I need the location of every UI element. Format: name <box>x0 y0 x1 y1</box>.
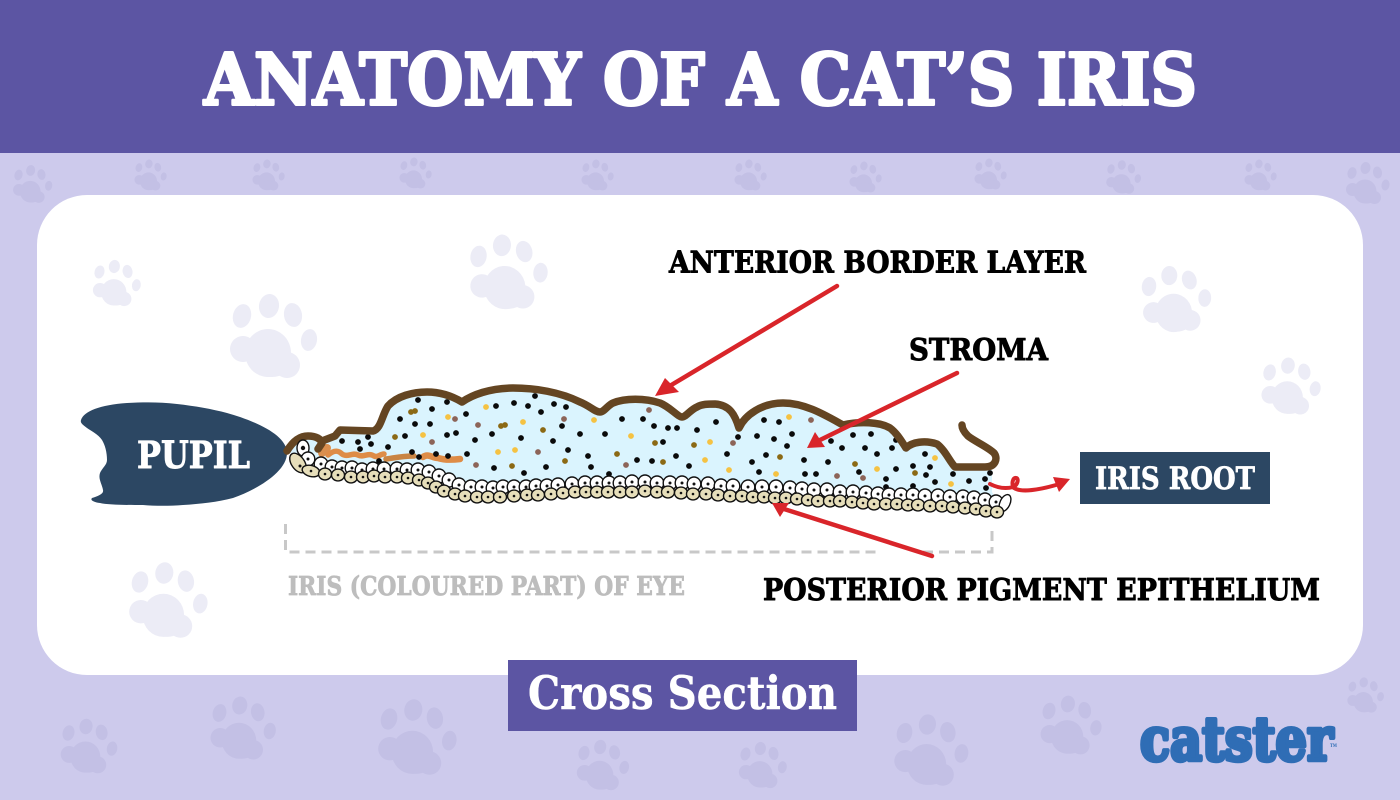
arrow: stroma <box>807 373 957 448</box>
stroma <box>288 388 1000 505</box>
logo: catster: catster <box>1140 705 1334 775</box>
logo: catster: TM <box>1330 743 1337 749</box>
iris bracket label: IRIS (COLOURED PART) OF EYE <box>288 572 685 602</box>
tan epithelium cells <box>286 450 1003 518</box>
label: iris root: IRIS ROOT <box>1095 461 1255 497</box>
header banner <box>0 0 1400 153</box>
arrow: posterior pigment epithelium <box>772 503 932 556</box>
label: posterior pigment epithelium: POSTERIOR PIGMENT EPITHELIUM <box>763 572 1320 607</box>
arrow: anterior border layer <box>655 286 837 396</box>
anterior border layer outline <box>287 388 996 467</box>
orange pigment streak <box>322 448 460 460</box>
arrow: iris root <box>990 477 1070 492</box>
iris cross section <box>286 388 1013 518</box>
label: stroma: STROMA <box>909 332 1049 367</box>
cross section label <box>508 660 857 731</box>
pigment dots <box>339 393 993 491</box>
label: iris root <box>1080 452 1270 504</box>
panel paw prints <box>93 229 1322 638</box>
iris extent bracket <box>286 524 992 552</box>
pupil label: PUPIL <box>137 433 250 477</box>
title: ANATOMY OF A CAT’S IRIS <box>203 38 1197 122</box>
cross section label: Cross Section <box>528 666 837 720</box>
background paw prints <box>13 157 1390 790</box>
label: anterior border layer: ANTERIOR BORDER LAYER <box>668 244 1086 280</box>
panel: cross section diagram <box>37 195 1363 675</box>
white epithelium cells <box>297 440 1013 513</box>
pupil <box>81 402 287 506</box>
